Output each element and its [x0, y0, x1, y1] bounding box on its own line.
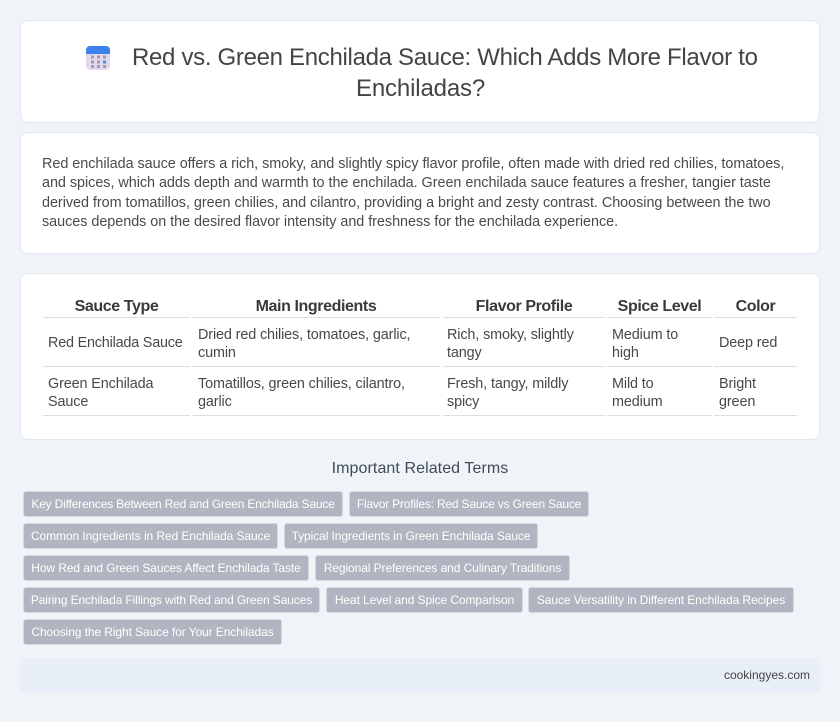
row: Red Enchilada Sauce: high [612, 345, 639, 361]
panel: title card [20, 20, 820, 123]
table header: Main Ingredients: Main Ingredients [256, 298, 376, 315]
row: Green Enchilada Sauce: Bright [719, 376, 756, 392]
row: Green Enchilada Sauce: garlic [198, 394, 232, 410]
row: Red Enchilada Sauce: Dried red chilies, tomatoes, garlic, [198, 327, 410, 343]
related term tags: Key Differences Between Red and Green Enchilada Sauce [31, 497, 335, 511]
description text [42, 156, 784, 230]
related term tags: Heat Level and Spice Comparison [335, 593, 514, 607]
description text: sauces depends on the desired flavor intensity and freshness for the enchilada experience. [42, 214, 618, 230]
row: Red Enchilada Sauce: tangy [447, 345, 482, 361]
footer source: cookingyes.com [724, 668, 810, 682]
related term tags: Choosing the Right Sauce for Your Enchiladas [31, 625, 274, 639]
row: Red Enchilada Sauce: Red Enchilada Sauce [48, 335, 183, 351]
title line 2: Enchiladas? [356, 75, 485, 102]
row: Green Enchilada Sauce: green [719, 394, 755, 410]
panel: description [20, 132, 820, 254]
row: Green Enchilada Sauce: Green Enchilada [48, 376, 153, 392]
table header: Color: Color [736, 298, 775, 315]
row: Green Enchilada Sauce: Mild to [612, 376, 654, 392]
row: Red Enchilada Sauce: cumin [198, 345, 236, 361]
icon: calendar [86, 46, 110, 70]
related term tags: Flavor Profiles: Red Sauce vs Green Sauce [357, 497, 581, 511]
table header: Spice Level: Spice Level [618, 298, 701, 315]
row: Green Enchilada Sauce: Fresh, tangy, mildly [447, 376, 568, 392]
panel: comparison table [20, 273, 820, 440]
related term tags: Pairing Enchilada Fillings with Red and Green Sauces [31, 593, 312, 607]
row: Green Enchilada Sauce: Sauce [48, 394, 88, 410]
description text: and spices, which adds depth and warmth to the enchilada. Green enchilada sauce features a fresher, tangier taste [42, 175, 771, 191]
row: Green Enchilada Sauce: Tomatillos, green chilies, cilantro, [198, 376, 405, 392]
table header: Flavor Profile: Flavor Profile [476, 298, 572, 315]
row: Red Enchilada Sauce: Medium to [612, 327, 678, 343]
related term tags: Regional Preferences and Culinary Traditions [324, 561, 561, 575]
heading: Important Related Terms: Important Related Terms [332, 460, 508, 477]
related term tags: Sauce Versatility in Different Enchilada Recipes [537, 593, 785, 607]
row: Green Enchilada Sauce: medium [612, 394, 662, 410]
related term tags [23, 491, 794, 645]
table header: Sauce Type: Sauce Type [75, 298, 158, 315]
related term tags: Common Ingredients in Red Enchilada Sauce [31, 529, 270, 543]
description text: derived from tomatillos, green chilies, and cilantro, providing a bright and zesty contrast. Choosing between the two [42, 195, 771, 211]
title line 1: Red vs. Green Enchilada Sauce: Which Adds More Flavor to [132, 44, 758, 71]
description text: Red enchilada sauce offers a rich, smoky, and slightly spicy flavor profile, often made with dried red chilies, tomatoes, [42, 156, 784, 172]
row: Green Enchilada Sauce [48, 376, 756, 410]
row: Red Enchilada Sauce: Rich, smoky, slightly [447, 327, 574, 343]
footer bar [20, 658, 820, 692]
related term tags: How Red and Green Sauces Affect Enchilada Taste [31, 561, 301, 575]
related term tags: Typical Ingredients in Green Enchilada Sauce [292, 529, 530, 543]
row: Green Enchilada Sauce: spicy [447, 394, 479, 410]
row: Red Enchilada Sauce: Deep red [719, 335, 777, 351]
row: Red Enchilada Sauce [48, 327, 777, 361]
